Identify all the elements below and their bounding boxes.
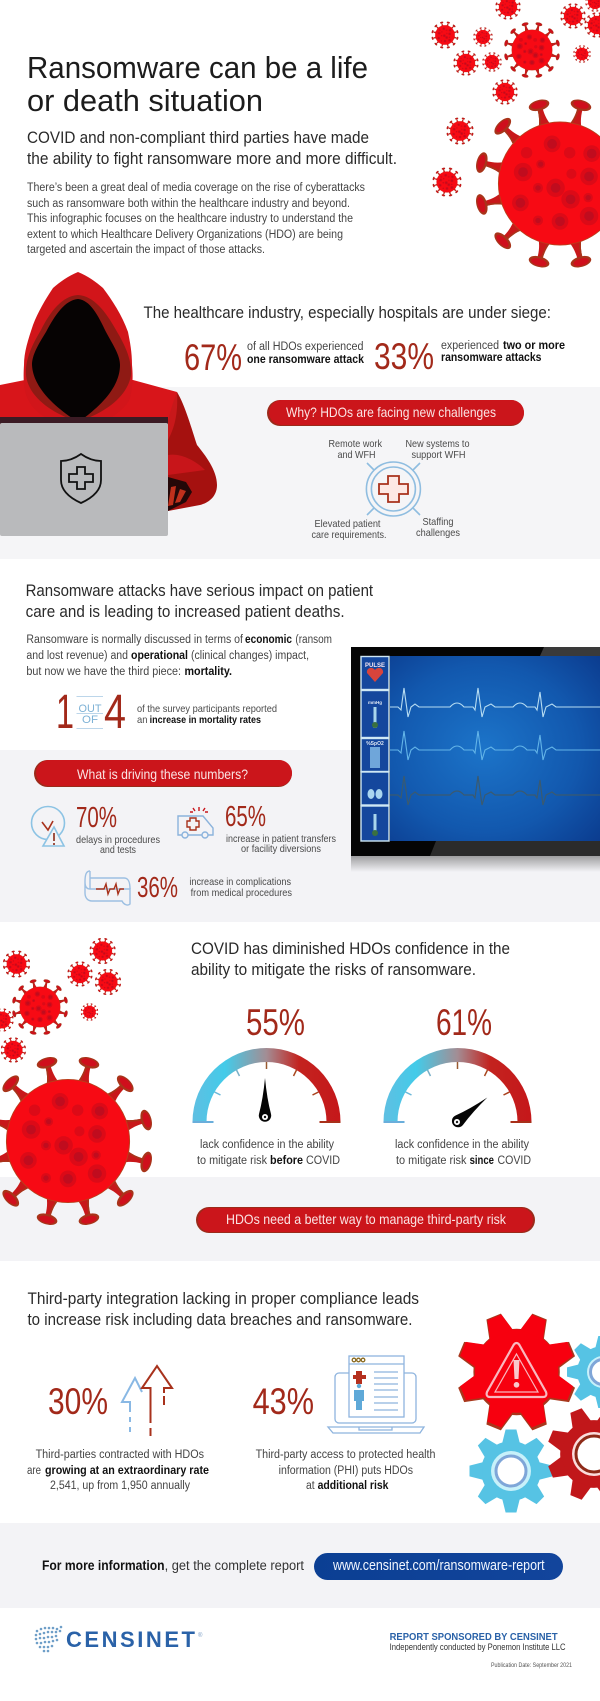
illustration: gears with warning <box>438 1294 600 1515</box>
stat: 1 out of 4: an <box>137 714 148 726</box>
stat: 33 percent <box>374 336 565 377</box>
heading: third-party integration <box>28 1290 419 1329</box>
gauge: 55 percent before COVID: lack confidence in the ability <box>200 1139 334 1151</box>
stat: 43 percent PHI: Third-party access to protected health <box>256 1449 436 1461</box>
stat: 33 percent: experienced <box>441 340 499 352</box>
label: elevated patient care <box>312 518 386 541</box>
stat: 43 percent PHI: 43% <box>253 1381 314 1422</box>
monitor side panel: %SpO2 <box>366 741 384 747</box>
text: mortality paragraph <box>26 634 332 678</box>
stat: 43 percent PHI: additional risk <box>318 1480 389 1492</box>
heading: COVID confidence: COVID has diminished HDOs confidence in the <box>191 940 510 958</box>
pill: why challenges <box>267 400 524 426</box>
stat: 36 percent complications: 36% <box>137 872 178 904</box>
pill: what is driving: What is driving these numbers? <box>77 766 248 782</box>
pill: better third-party risk <box>196 1207 535 1233</box>
monitor side panel: PULSE <box>365 663 385 669</box>
stat: 1 out of 4: OUT <box>78 703 102 715</box>
pill: report URL <box>314 1553 563 1580</box>
call to action: complete report: , get the complete report <box>165 1558 304 1573</box>
gauge: 61 percent since COVID <box>384 1002 532 1167</box>
call to action: complete report: For more information <box>42 1558 165 1573</box>
stat: 67 percent: 67% <box>184 337 242 378</box>
intro text: This infographic focuses on the healthcare industry to understand the <box>27 213 353 225</box>
gray band: third-party callout <box>0 1177 600 1261</box>
stat: 65 percent transfers: 65% <box>225 801 266 833</box>
gray band: drivers <box>0 750 600 922</box>
stat: 36 percent complications: increase in complications <box>189 876 291 888</box>
intro text: such as ransomware both within the healthcare industry and beyond. <box>27 198 350 210</box>
gauge: 61 percent since COVID: to mitigate risk <box>396 1155 467 1167</box>
stat: 33 percent: ransomware attacks <box>441 352 542 364</box>
intro text: There’s been a great deal of media coverage on the rise of cyberattacks <box>27 182 365 194</box>
icon: scroll with ECG <box>85 871 130 905</box>
stat: 1 out of 4: 4 <box>104 686 126 739</box>
pill: report URL: www.censinet.com/ransomware-report <box>332 1558 545 1574</box>
gauge: 61 percent since COVID: since <box>470 1155 494 1167</box>
stat: 36 percent complications: from medical procedures <box>191 887 292 899</box>
stat: 43 percent PHI: information (PHI) puts HDOs <box>279 1465 413 1477</box>
icon: shield with cross on laptop <box>61 454 101 503</box>
stat: 1 out of 4: increase in mortality rates <box>150 714 261 726</box>
heading: patient care impact: care and is leading to increased patient deaths. <box>26 603 345 621</box>
gauge: 61 percent since COVID: lack confidence in the ability <box>395 1139 529 1151</box>
heading: patient care impact: Ransomware attacks have serious impact on patient <box>26 582 373 600</box>
gauge: 55 percent before COVID: to mitigate risk <box>197 1155 267 1167</box>
stat: 30 percent growth <box>27 1366 209 1492</box>
subtitle: COVID and non-compliant third parties have made <box>27 129 369 147</box>
stat: 30 percent growth: 2,541, up from 1,950 annually <box>50 1480 190 1492</box>
label: remote work <box>328 438 383 461</box>
subtitle: the ability to fight ransomware more and more difficult. <box>27 150 397 168</box>
label: elevated patient care: care requirements. <box>312 529 386 541</box>
text: mortality paragraph: but now we have the third piece: <box>26 666 181 678</box>
stat: 36 percent complications <box>85 871 292 905</box>
sponsor credit <box>390 1631 573 1669</box>
title: or death situation <box>27 83 263 118</box>
pill: better third-party risk: HDOs need a better way to manage third-party risk <box>226 1211 507 1227</box>
label: new systems: New systems to <box>406 438 470 450</box>
stat: 70 percent delays: 70% <box>76 802 117 834</box>
stat: 33 percent: 33% <box>374 336 434 377</box>
stat: 30 percent growth: are <box>27 1465 41 1477</box>
icon: virus cluster left <box>0 938 154 1227</box>
label: staffing <box>416 516 460 539</box>
intro text: targeted and ascertain the impact of those attacks. <box>27 244 265 256</box>
stat: 70 percent delays: and tests <box>100 844 136 856</box>
stat: 33 percent: two or more <box>503 340 565 352</box>
illustration: patient monitor <box>351 647 600 872</box>
gray band: challenges <box>0 387 600 559</box>
logo: Censinet: ® <box>198 1632 203 1639</box>
heading: COVID confidence: ability to mitigate the risks of ransomware. <box>191 961 476 979</box>
label: staffing: Staffing <box>422 516 454 528</box>
heading: patient care impact <box>26 582 373 621</box>
heading: third-party integration: Third-party integration lacking in proper compliance leads <box>28 1290 419 1308</box>
stat: 67 percent <box>184 337 365 378</box>
stat: 65 percent transfers: increase in patient transfers <box>226 833 336 845</box>
gray band: more information <box>0 1523 600 1608</box>
icon: dotted globe <box>35 1626 62 1652</box>
text: mortality paragraph: (ransom <box>295 634 332 646</box>
stat: 1 out of 4: 1 <box>56 686 74 739</box>
text: mortality paragraph: economic <box>245 634 293 646</box>
monitor side panel: mmHg <box>368 700 382 705</box>
icon: virus cluster top right <box>431 0 600 270</box>
logo: Censinet: CENSINET <box>66 1627 196 1652</box>
text: mortality paragraph: Ransomware is normally discussed in terms of <box>26 634 244 646</box>
gauge: 61 percent since COVID: 61% <box>436 1002 492 1043</box>
subtitle <box>27 129 397 168</box>
stat: 67 percent: one ransomware attack <box>247 354 365 366</box>
icon: medical cross in rings <box>366 462 420 516</box>
call to action: complete report <box>42 1553 563 1580</box>
icon: up arrows <box>122 1366 172 1436</box>
text: mortality paragraph: mortality. <box>184 666 232 678</box>
sponsor credit: REPORT SPONSORED BY CENSINET <box>390 1631 558 1643</box>
icon: laptop with patient record <box>328 1356 424 1433</box>
gauge: 55 percent before COVID: 55% <box>246 1002 305 1043</box>
text: mortality paragraph: operational <box>131 650 188 662</box>
stat: 43 percent PHI: at <box>306 1480 315 1492</box>
heading: under siege: The healthcare industry, especially hospitals are under siege: <box>144 304 551 322</box>
label: new systems <box>406 438 470 461</box>
label: remote work: and WFH <box>338 449 376 461</box>
title: Ransomware can be a life <box>27 50 368 85</box>
pill: what is driving <box>34 760 292 787</box>
label: elevated patient care: Elevated patient <box>314 518 381 530</box>
label: staffing: challenges <box>416 527 460 539</box>
pill: why challenges: Why? HDOs are facing new challenges <box>286 404 496 420</box>
stat: 1 out of 4: OF <box>82 714 98 726</box>
heading: third-party integration: to increase risk including data breaches and ransomware. <box>28 1311 412 1329</box>
stat: 70 percent delays: delays in procedures <box>76 834 160 846</box>
icon: ambulance <box>178 807 213 838</box>
text: mortality paragraph: (clinical changes) impact, <box>191 650 309 662</box>
stat: 43 percent PHI <box>253 1356 436 1492</box>
stat: 30 percent growth: Third-parties contracted with HDOs <box>36 1449 204 1461</box>
label: new systems: support WFH <box>412 449 466 461</box>
stat: 1 out of 4 <box>56 686 277 739</box>
stat: 65 percent transfers <box>178 801 336 855</box>
chart: ECG traces <box>390 688 600 805</box>
text: mortality paragraph: and lost revenue) and <box>26 650 128 662</box>
stat: 65 percent transfers: or facility diversions <box>241 843 321 855</box>
stat: 1 out of 4: of the survey participants reported <box>137 703 277 715</box>
monitor side panel <box>360 656 390 841</box>
stat: 30 percent growth: 30% <box>48 1381 108 1422</box>
intro text <box>27 182 365 256</box>
gauge: 55 percent before COVID: COVID <box>306 1155 340 1167</box>
gauge: 55 percent before COVID <box>192 1002 340 1167</box>
gauge: 61 percent since COVID: COVID <box>498 1155 531 1167</box>
gauge: 55 percent before COVID: before <box>270 1155 303 1167</box>
heading: COVID confidence <box>191 940 510 979</box>
intro text: extent to which Healthcare Delivery Organizations (HDO) are being <box>27 229 343 241</box>
illustration: hooded hacker with laptop <box>0 272 217 536</box>
label: remote work: Remote work <box>328 438 383 450</box>
sponsor credit: Publication Date: September 2021 <box>491 1663 573 1669</box>
stat: 30 percent growth: growing at an extraordinary rate <box>45 1465 209 1477</box>
title <box>27 50 368 118</box>
stat: 70 percent delays <box>32 802 160 856</box>
stat: 67 percent: of all HDOs experienced <box>247 341 364 353</box>
icon: clock with warning <box>32 806 64 846</box>
